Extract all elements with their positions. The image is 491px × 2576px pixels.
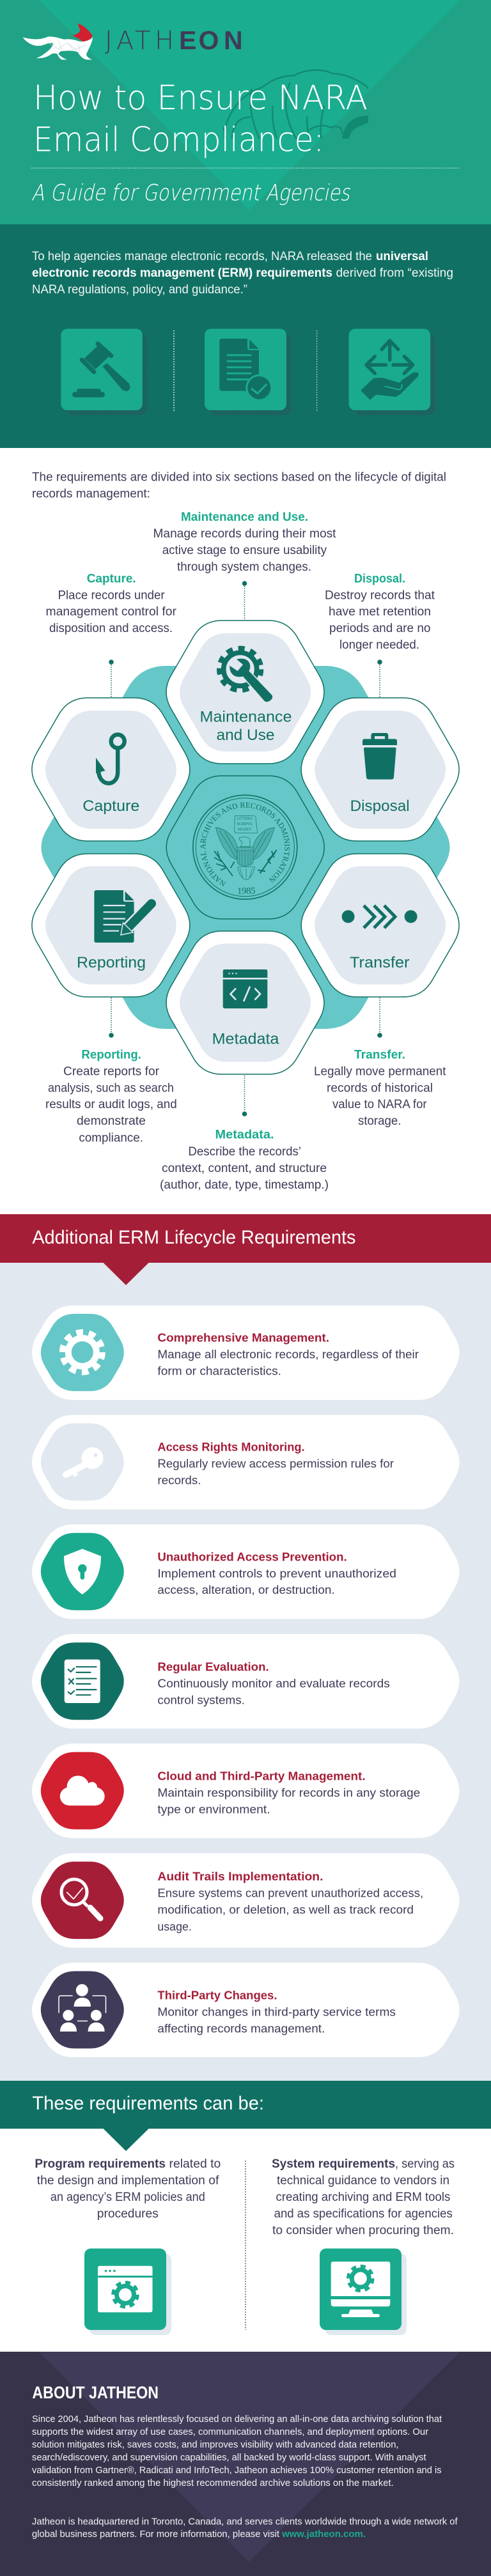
intro text: electronic records management (ERM) requirements: [32, 266, 332, 280]
intro text: [32, 250, 453, 297]
subtitle: A Guide for Government Agencies: [30, 180, 354, 206]
callout: Reporting: Create reports for: [63, 1065, 160, 1078]
lead-in text: [32, 470, 446, 501]
footer body text: www.jatheon.com.: [281, 2529, 366, 2540]
callout: Reporting: compliance.: [79, 1131, 143, 1145]
callout: Maintenance and Use: active stage to ensure usability: [162, 544, 327, 557]
footer body text: [32, 2414, 458, 2540]
card: Unauthorized Access Prevention: Implement controls to prevent unauthorized: [157, 1566, 396, 1580]
eagle watermark: [222, 69, 368, 139]
footer body text: Jatheon is headquartered in Toronto, Canada, and serves clients worldwide through a wide network of: [32, 2516, 458, 2527]
callout: Metadata: (author, date, type, timestamp.): [160, 1178, 329, 1192]
lead-in text: The requirements are divided into six sections based on the lifecycle of digital: [32, 470, 446, 484]
hexagon: NARA seal: LITTERA: [237, 817, 253, 821]
card: Third-Party Changes: [32, 1963, 459, 2057]
heading band: These requirements can be: These requirements can be:: [32, 2093, 264, 2114]
title: Email Compliance:: [33, 121, 324, 160]
hexagon: Transfer: Transfer: [350, 954, 410, 971]
footer heading: ABOUT JATHEON: [32, 2383, 159, 2402]
callout: Maintenance and Use: Manage records during their most: [153, 527, 336, 541]
text: program requirements: related to: [169, 2157, 221, 2171]
hexagon: Capture: Capture: [82, 798, 139, 815]
card: Access Rights Monitoring: Regularly review access permission rules for: [157, 1456, 394, 1470]
card: Third-Party Changes: Monitor changes in third-party service terms: [157, 2005, 396, 2018]
card: Unauthorized Access Prevention: [32, 1525, 459, 1619]
callout: Capture: disposition and access.: [49, 622, 173, 635]
callout: Capture: management control for: [46, 605, 177, 619]
icon: people network: [59, 1984, 106, 2032]
hexagon: Transfer: [301, 854, 459, 997]
callout: Disposal: have met retention: [329, 605, 431, 619]
callout: Capture: [46, 572, 177, 635]
hexagon: NARA seal: NATIONAL ARCHIVES AND RECORDS ADMINISTRATION: [200, 803, 290, 887]
footer panel: About Jatheon: [0, 2352, 491, 2576]
text: system requirements: , serving as: [395, 2157, 455, 2171]
footer body text: consistently ranked among the highest recommended archive solutions on the market.: [32, 2478, 394, 2488]
title: [33, 79, 368, 160]
hexagon: Reporting: Reporting: [77, 954, 146, 971]
icon: shield: [64, 1549, 101, 1594]
callout: Reporting: results or audit logs, and: [45, 1098, 177, 1111]
footer body text: supports the widest array of use cases, communication channels, and deployment options. Our: [32, 2426, 428, 2437]
card: Comprehensive Management: form or characteristics.: [157, 1364, 281, 1377]
callout: Maintenance and Use: Maintenance and Use.: [181, 511, 308, 524]
card: Cloud and Third-Party Management: Cloud and Third-Party Management.: [157, 1770, 366, 1783]
logo: Jatheon: [23, 24, 243, 59]
card: Audit Trails Implementation: [32, 1853, 459, 1948]
lead-in text: records management:: [32, 488, 150, 501]
icon: fox: [23, 24, 93, 59]
card: Audit Trails Implementation: Audit Trails Implementation.: [157, 1869, 323, 1883]
callout: Disposal: Disposal.: [354, 572, 405, 585]
icon tile: gavel: [61, 328, 147, 415]
card: Access Rights Monitoring: records.: [157, 1473, 201, 1486]
icon: trash bin: [362, 733, 397, 780]
panel: additional requirements background: [0, 1263, 491, 2081]
intro panel: [0, 224, 491, 448]
text: program requirements: the design and implementation of: [37, 2174, 219, 2187]
hexagon: NARA seal: SCRIPTA: [237, 822, 253, 826]
card: Comprehensive Management: Comprehensive Management.: [157, 1331, 329, 1345]
hexagon: Maintenance and Use: [166, 621, 324, 764]
card: Audit Trails Implementation: modification, or deletion, as well as track record: [157, 1903, 414, 1917]
logo wordmark: JATH: [105, 26, 174, 56]
footer body text: search/ediscovery, and supervision capabilities, all backed by world-class support. With analyst: [32, 2452, 426, 2463]
icon: transfer arrows: [342, 906, 417, 928]
icon tile: document check: [205, 328, 292, 415]
hexagon: Reporting: [32, 854, 190, 997]
callout: Transfer: storage.: [358, 1114, 401, 1128]
card: Audit Trails Implementation: Ensure systems can prevent unauthorized access,: [157, 1886, 423, 1899]
callout: Maintenance and Use: through system changes.: [177, 560, 311, 574]
callout: Capture: Capture.: [87, 572, 136, 585]
hexagon: Capture: [32, 698, 190, 841]
card: Comprehensive Management: [32, 1306, 459, 1400]
callout: Metadata: [160, 1129, 329, 1192]
card: Cloud and Third-Party Management: type or environment.: [157, 1802, 270, 1816]
icon: document and pencil: [94, 890, 153, 943]
intro text: NARA regulations, policy, and guidance.”: [32, 283, 247, 297]
callout: Metadata: context, content, and structure: [162, 1162, 327, 1175]
callout: Transfer: Legally move permanent: [314, 1065, 446, 1078]
hexagon: Maintenance and Use: and Use: [216, 727, 275, 744]
text: system requirements: creating archiving and ERM tools: [276, 2191, 450, 2204]
card: Unauthorized Access Prevention: Unauthorized Access Prevention.: [157, 1550, 347, 1563]
callout: Disposal: longer needed.: [339, 638, 419, 652]
footer body text: validation from Gartner®, Radicati and InfoTech, Jatheon achieves 100% customer retention and is: [32, 2465, 442, 2476]
hexagon: NARA seal: 1985: [237, 886, 256, 896]
icon: key: [66, 1447, 104, 1477]
text: program requirements: an agency’s ERM policies and: [51, 2191, 205, 2204]
callout: Reporting: analysis, such as search: [48, 1082, 174, 1095]
title: How to Ensure NARA: [33, 79, 368, 118]
card: Unauthorized Access Prevention: access, alteration, or destruction.: [157, 1583, 335, 1596]
card: Regular Evaluation: Regular Evaluation.: [157, 1660, 269, 1674]
logo wordmark: EON: [179, 26, 243, 55]
intro text: derived from “existing: [336, 266, 453, 280]
heading band: Additional ERM Lifecycle Requirements: Additional ERM Lifecycle Requirements: [32, 1227, 355, 1248]
hexagon: NARA seal: MANET: [238, 828, 252, 831]
callout: Metadata: Describe the records’: [188, 1145, 301, 1159]
footer body text: global business partners. For more information, please visit: [32, 2529, 280, 2540]
callout: Disposal: Destroy records that: [325, 589, 435, 602]
teal background hexagon: [41, 666, 450, 1029]
text: system requirements: to consider when procuring them.: [272, 2224, 454, 2237]
callout: Transfer: [314, 1049, 446, 1128]
callout: Reporting: demonstrate: [77, 1114, 146, 1128]
callout: Disposal: [325, 572, 435, 652]
heading band: Additional ERM Lifecycle Requirements: [0, 1214, 491, 1285]
hexagon: Metadata: [166, 931, 324, 1074]
text: program requirements: [35, 2157, 221, 2221]
icon: code window: [223, 969, 267, 1008]
text: system requirements: and as specifications for agencies: [274, 2207, 453, 2221]
card: Audit Trails Implementation: usage.: [157, 1920, 192, 1933]
card: Third-Party Changes: affecting records management.: [157, 2021, 325, 2035]
text: program requirements: Program requirements: [35, 2157, 166, 2171]
text: system requirements: technical guidance to vendors in: [277, 2174, 449, 2187]
hexagon: Disposal: [301, 698, 459, 841]
header panel: [0, 0, 491, 224]
lifecycle hexagon diagram: [31, 581, 460, 1116]
card: Third-Party Changes: Third-Party Changes.: [157, 1989, 277, 2002]
icon: checklist: [65, 1660, 100, 1703]
callout: Reporting: Reporting.: [81, 1049, 141, 1062]
callout: Maintenance and Use: [153, 511, 336, 574]
callout: Capture: Place records under: [58, 589, 165, 602]
icon tile: hand with arrows: [349, 328, 435, 415]
card: Cloud and Third-Party Management: [32, 1743, 459, 1838]
callout: Transfer: records of historical: [327, 1082, 433, 1095]
text: system requirements: System requirements: [272, 2157, 395, 2171]
card: Comprehensive Management: Manage all electronic records, regardless of their: [157, 1347, 419, 1361]
intro text: universal: [376, 250, 428, 263]
heading band: These requirements can be: [0, 2081, 491, 2151]
callout: Reporting: [45, 1049, 177, 1145]
icon: hook: [96, 735, 125, 783]
hexagon: Maintenance and Use: Maintenance: [199, 709, 292, 726]
hexagon: Metadata: Metadata: [212, 1030, 279, 1048]
icon: magnifier with check: [61, 1879, 100, 1918]
text: system requirements: [272, 2157, 455, 2237]
footer body text: Since 2004, Jatheon has relentlessly focused on delivering an all-in-one data archiving solution that: [32, 2414, 442, 2425]
card: Regular Evaluation: Continuously monitor and evaluate records: [157, 1677, 390, 1690]
footer body text: solution mitigates risk, saves costs, and improves visibility with advanced data retention,: [32, 2439, 399, 2450]
hexagon: Disposal: Disposal: [350, 798, 410, 815]
card: Access Rights Monitoring: Access Rights Monitoring.: [157, 1440, 305, 1453]
callout: Transfer: Transfer.: [354, 1049, 405, 1062]
hexagon: NARA seal: [166, 775, 325, 920]
text: program requirements: procedures: [97, 2207, 159, 2221]
icon tile: settings monitor: [320, 2248, 407, 2335]
icon tile: settings window: [84, 2248, 171, 2335]
card: Access Rights Monitoring: [32, 1415, 459, 1509]
icon: gear: [62, 1332, 102, 1373]
callout: Disposal: periods and are no: [329, 622, 431, 635]
card: Cloud and Third-Party Management: Maintain responsibility for records in any storage: [157, 1786, 420, 1800]
icon: cloud: [60, 1776, 105, 1805]
callout: Transfer: value to NARA for: [332, 1098, 427, 1111]
icon: gear and wrench: [219, 649, 272, 702]
callout: Metadata: Metadata.: [215, 1129, 274, 1142]
card: Regular Evaluation: control systems.: [157, 1693, 245, 1706]
intro text: To help agencies manage electronic records, NARA released the: [32, 250, 372, 263]
card: Regular Evaluation: [32, 1634, 459, 1729]
